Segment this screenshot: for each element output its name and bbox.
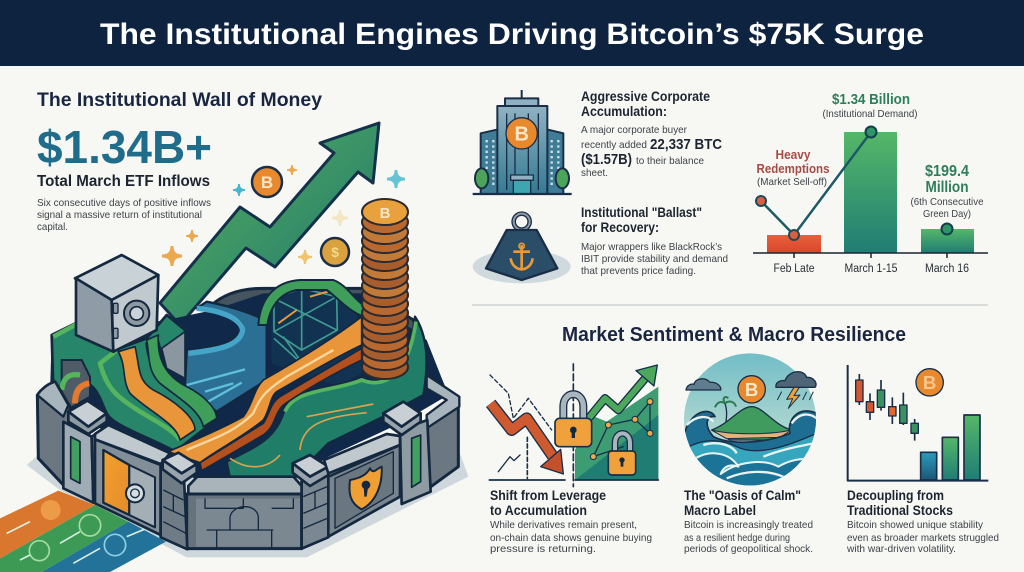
gate alcove bbox=[62, 360, 90, 408]
description: sheet. bbox=[581, 167, 608, 179]
right pillar bbox=[383, 402, 431, 504]
description: Major wrappers like BlackRock’s bbox=[581, 241, 722, 253]
icon: candlestick and bars: B bbox=[923, 372, 936, 393]
bar chart: ETF flows bbox=[753, 91, 988, 275]
description: 22,337 BTC bbox=[650, 136, 722, 153]
icon: dollar coin: $ bbox=[331, 244, 339, 260]
green ribbon bbox=[147, 335, 217, 427]
trend line bbox=[756, 126, 952, 240]
back wall bbox=[212, 288, 447, 393]
front wall bbox=[187, 477, 302, 549]
icon: shield keyhole bbox=[349, 467, 382, 509]
label: March 16 value: $199.4 bbox=[925, 163, 969, 180]
description: periods of geopolitical shock. bbox=[684, 543, 813, 555]
arrow: rising green trend bbox=[160, 123, 379, 325]
blue arrows bbox=[187, 369, 245, 403]
description bbox=[846, 519, 999, 555]
channel: teal ribbon bbox=[188, 308, 243, 353]
stone block bbox=[162, 332, 185, 378]
label: March 16 value bbox=[910, 163, 984, 220]
lock wall bbox=[324, 434, 400, 537]
icon: locked trend chart bbox=[489, 364, 658, 487]
panel: institutional wall of money text bbox=[37, 89, 322, 233]
channel: blue panel bbox=[185, 302, 267, 412]
title: The Institutional Engines Driving Bitcoin’s $75K Surge bbox=[100, 18, 924, 51]
money flow: bottom ribbons bbox=[0, 491, 166, 572]
description: on-chain data shows genuine buying bbox=[490, 532, 652, 544]
label: March 1-15 value: (Institutional Demand) bbox=[822, 108, 918, 120]
heading: Traditional Stocks bbox=[847, 503, 953, 518]
green platform bbox=[52, 315, 217, 452]
description: A major corporate buyer bbox=[581, 124, 687, 136]
heading: Institutional "Ballast" bbox=[581, 205, 702, 220]
description: pressure is returning. bbox=[490, 543, 596, 555]
sparkles bbox=[162, 165, 405, 266]
axis labels: March 1-15 bbox=[844, 263, 898, 275]
heading bbox=[490, 488, 606, 518]
right green ribbon upper bbox=[258, 280, 363, 325]
interior bbox=[50, 293, 448, 480]
green top edge bbox=[53, 325, 180, 440]
description: Six consecutive days of positive inflows bbox=[37, 197, 211, 209]
panel: institutional ballast bbox=[473, 205, 728, 283]
left corner pillar bbox=[161, 453, 197, 549]
heading: to Accumulation bbox=[490, 503, 587, 518]
description: to their balance bbox=[636, 155, 704, 167]
panel: oasis of calm bbox=[683, 350, 817, 555]
description: capital. bbox=[37, 221, 68, 233]
icon: candlestick and bars bbox=[848, 365, 988, 481]
description bbox=[684, 519, 813, 555]
heading: for Recovery: bbox=[581, 220, 659, 235]
description bbox=[581, 241, 728, 277]
description: with war-driven volatility. bbox=[846, 543, 956, 555]
icon: office building: B bbox=[514, 124, 529, 146]
orange ribbon: from safe bbox=[118, 347, 195, 440]
label: Feb Late value: (Market Sell-off) bbox=[757, 176, 827, 188]
gate wall with door bbox=[95, 425, 170, 535]
label: Feb Late value: Heavy bbox=[776, 148, 811, 162]
icon: safe vault bbox=[75, 255, 158, 352]
shadow bbox=[27, 453, 468, 557]
heading: market sentiment: Market Sentiment & Macro Resilience bbox=[562, 324, 906, 346]
description: While derivatives remain present, bbox=[490, 519, 637, 531]
description: Bitcoin is increasingly treated bbox=[684, 519, 813, 531]
heading bbox=[684, 488, 801, 518]
header banner bbox=[0, 0, 1024, 66]
right wall bbox=[427, 375, 458, 487]
right corner pillar bbox=[293, 455, 328, 549]
main orange ribbon shadow bbox=[200, 348, 362, 471]
label: Feb Late value: Redemptions bbox=[756, 162, 830, 176]
icon: office building bbox=[473, 90, 572, 194]
icon: bitcoin coin stack bbox=[362, 199, 408, 379]
icon: island with waves bbox=[683, 350, 817, 490]
heading: Aggressive Corporate bbox=[581, 89, 710, 104]
heading: The Institutional Wall of Money bbox=[37, 89, 322, 111]
description: signal a massive return of institutional bbox=[37, 209, 202, 221]
axis labels bbox=[774, 263, 969, 275]
axis bbox=[753, 253, 988, 258]
panel: corporate accumulation bbox=[473, 89, 722, 194]
label: Feb Late value bbox=[756, 148, 830, 188]
description bbox=[37, 197, 211, 233]
main orange ribbon bbox=[168, 317, 362, 463]
description: recently added bbox=[581, 139, 647, 151]
heading bbox=[847, 488, 953, 518]
description: Bitcoin showed unique stability bbox=[847, 519, 984, 531]
heading bbox=[581, 89, 710, 119]
left wall top bbox=[37, 382, 68, 417]
description bbox=[581, 124, 722, 179]
description bbox=[490, 519, 652, 555]
label: March 1-15 value: $1.34 Billion bbox=[832, 91, 910, 108]
heading: Shift from Leverage bbox=[490, 488, 606, 503]
geometric cube bbox=[272, 287, 362, 387]
heading: Decoupling from bbox=[847, 488, 944, 503]
sub heading: Total March ETF Inflows bbox=[37, 173, 210, 190]
label: March 16 value: (6th Consecutive bbox=[910, 196, 984, 208]
right wall top bbox=[427, 375, 459, 428]
heading bbox=[581, 205, 702, 235]
icon: dollar coin bbox=[321, 238, 349, 266]
icon: anchor weight bbox=[473, 214, 571, 283]
description: ($1.57B) bbox=[581, 151, 632, 168]
heading: Accumulation: bbox=[581, 104, 667, 119]
bars bbox=[767, 132, 974, 253]
illustration: fortress with money flows bbox=[0, 123, 468, 572]
description: even as broader markets struggled bbox=[847, 532, 999, 544]
description: IBIT provide stability and demand bbox=[581, 253, 728, 265]
big number: $1.34B+ bbox=[37, 121, 212, 173]
icon: bitcoin coin stack: B bbox=[380, 205, 391, 222]
left pillar bbox=[63, 401, 110, 503]
label: March 16 value: Million bbox=[926, 179, 968, 196]
right green ribbon lower bbox=[227, 317, 426, 478]
icon: island with waves: B bbox=[745, 379, 758, 400]
icon: bitcoin coin: B bbox=[261, 173, 273, 192]
panel: decoupling from stocks bbox=[846, 365, 999, 555]
description: as a resilient hedge during bbox=[684, 532, 790, 544]
axis labels: Feb Late bbox=[774, 263, 814, 275]
left wall bbox=[37, 382, 70, 487]
heading: Macro Label bbox=[684, 503, 756, 518]
heading: The "Oasis of Calm" bbox=[684, 488, 801, 503]
label: March 1-15 value bbox=[822, 91, 918, 120]
icon: bitcoin coin bbox=[252, 167, 282, 197]
description: that prevents price fading. bbox=[581, 265, 696, 277]
label: March 16 value: Green Day) bbox=[923, 208, 971, 220]
axis labels: March 16 bbox=[925, 263, 969, 275]
panel: leverage to accumulation bbox=[489, 364, 658, 555]
